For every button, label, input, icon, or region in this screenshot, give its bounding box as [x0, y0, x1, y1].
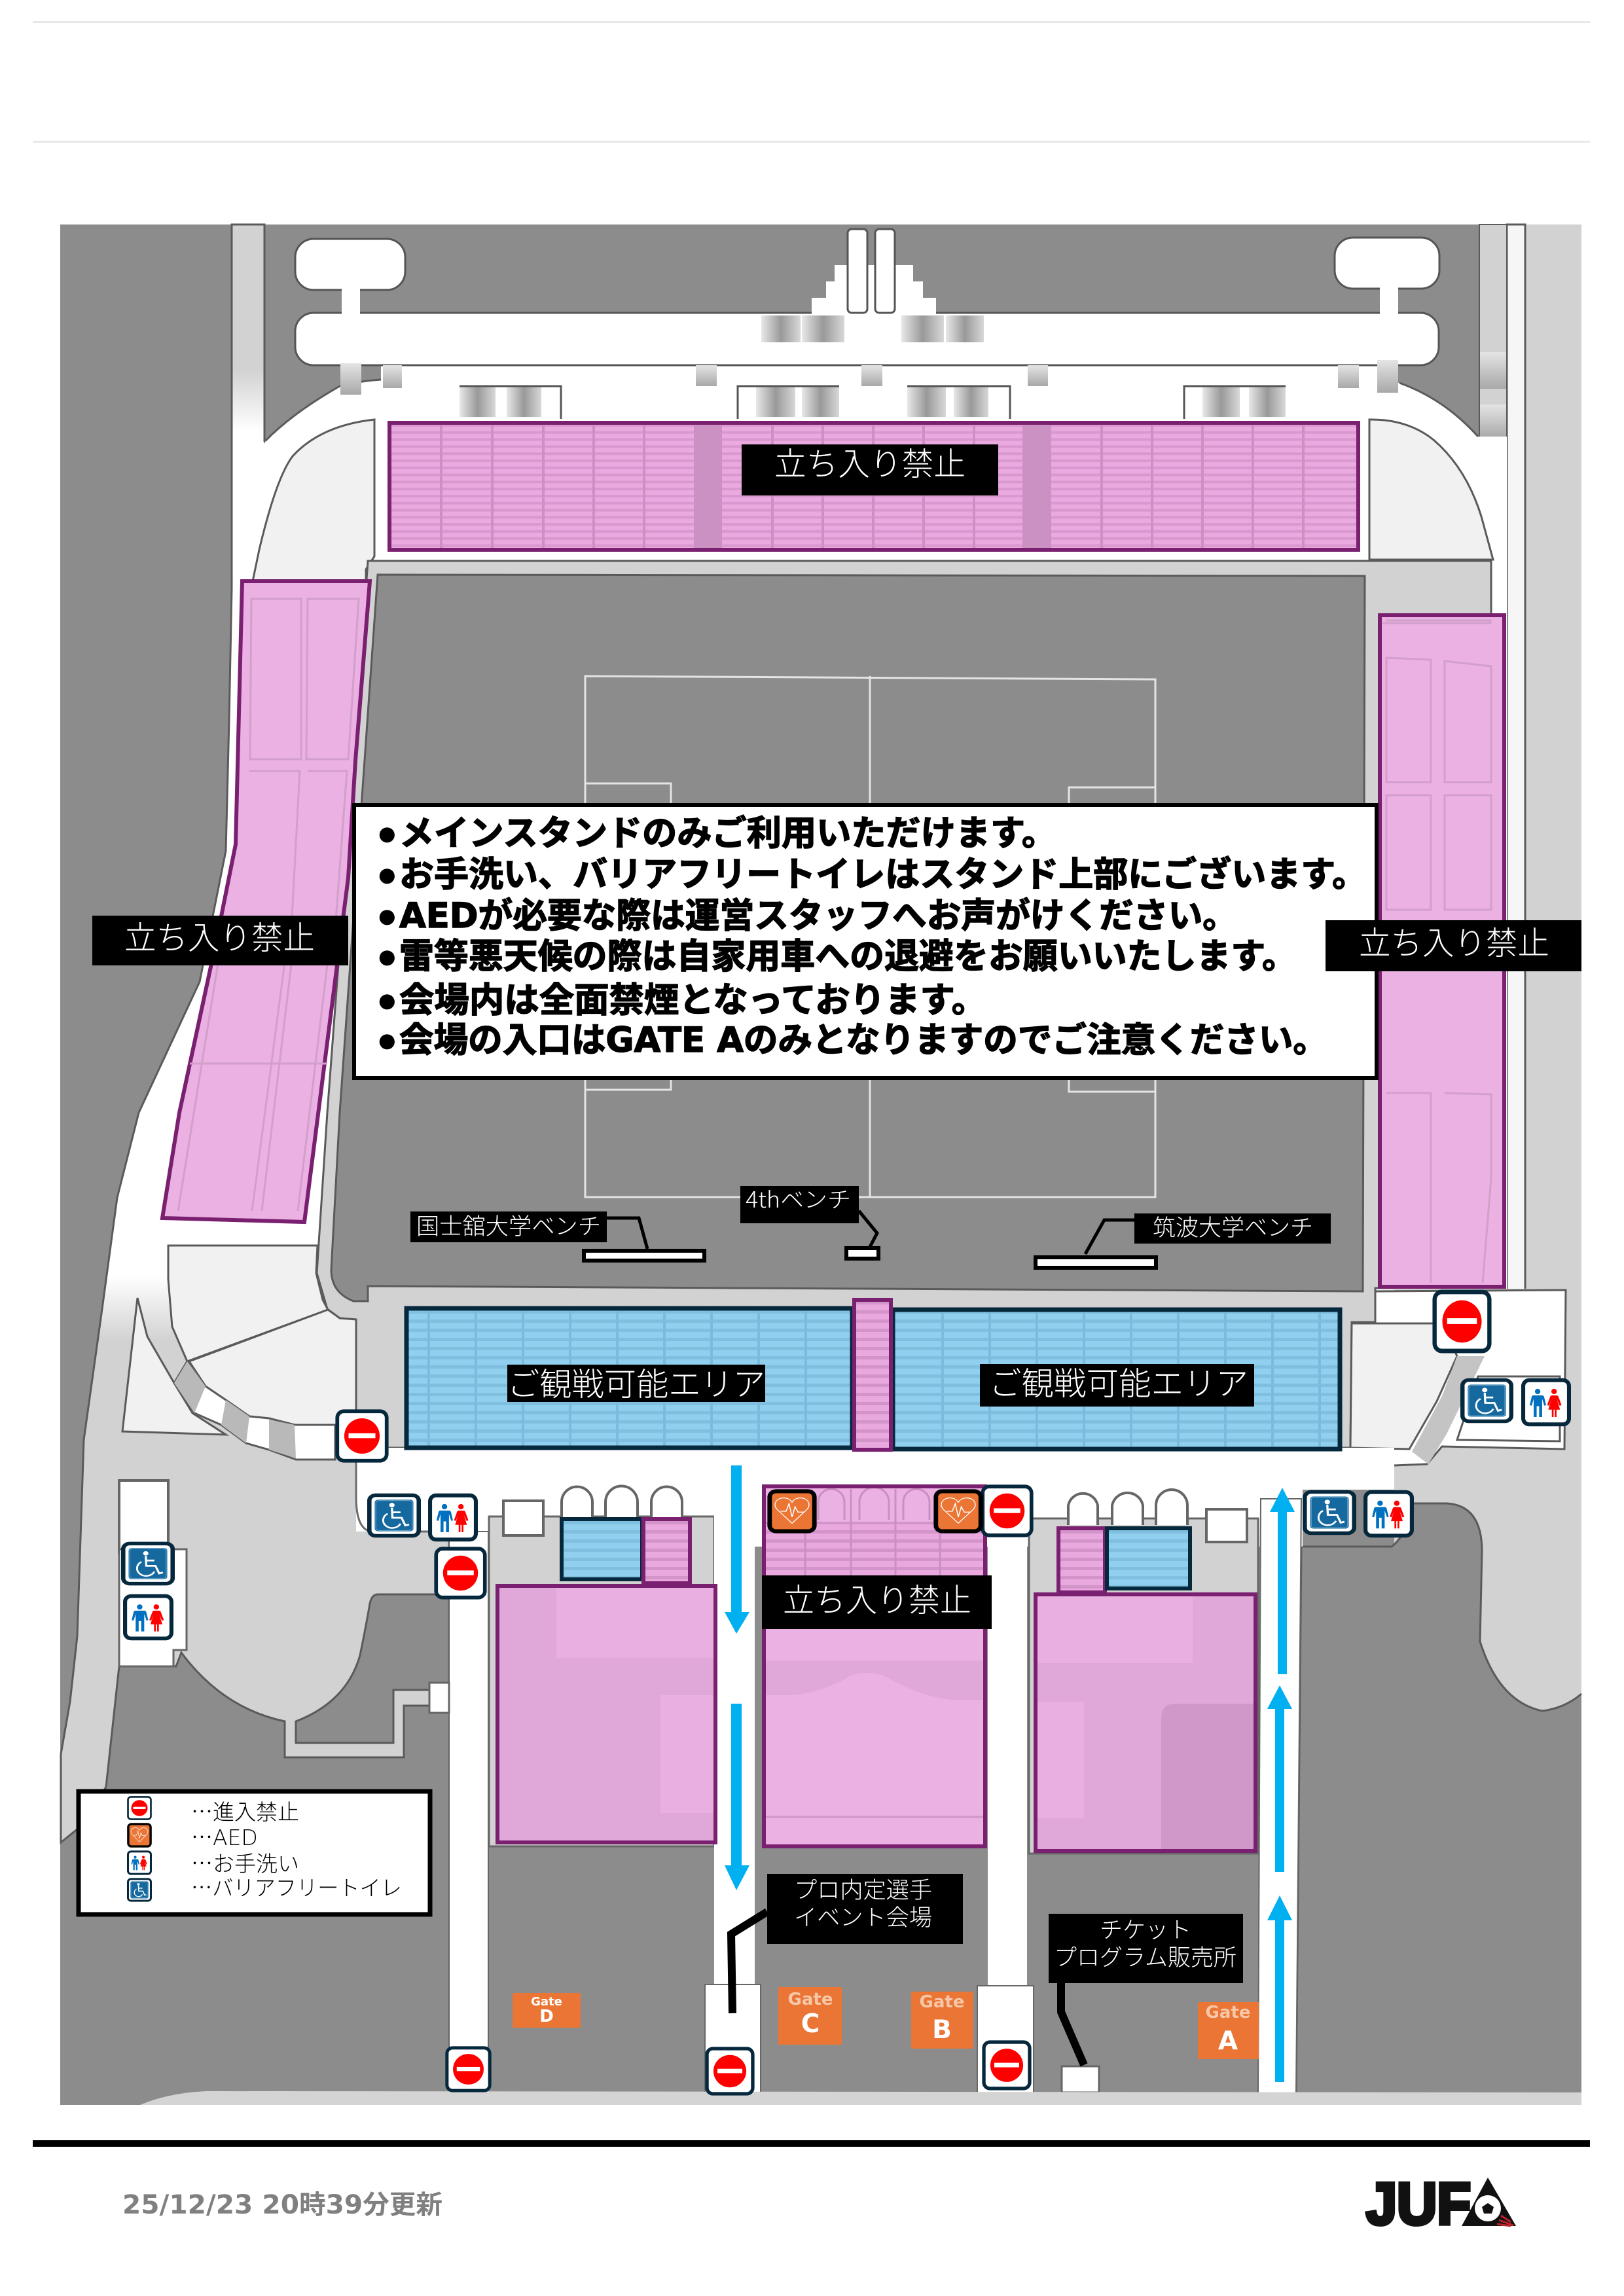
- legend text: …AED: [191, 1820, 258, 1852]
- label: pro event venue: プロ内定選手: [794, 1872, 932, 1905]
- label: no entry east: 立ち入り禁止: [1359, 918, 1549, 964]
- pale plaza west C: [122, 1298, 226, 1435]
- callout: notices: AEDが必要な際は運営スタッフへお声がけください。: [399, 896, 1237, 936]
- legend icon: AED: [128, 1824, 151, 1846]
- road 2: [714, 1473, 755, 1990]
- bench: 4th official: [740, 1182, 878, 1259]
- callout: notices: 雷等悪天候の際は自家用車への退避をお願いいたします。: [399, 937, 1297, 977]
- callout: notices: ●: [376, 855, 398, 894]
- legend text: …進入禁止: [191, 1795, 299, 1826]
- gate B: [911, 1992, 973, 2049]
- legend text: [191, 1795, 402, 1902]
- footer rule: [33, 2140, 1590, 2147]
- gate B walkway box: [977, 1986, 1034, 2093]
- label: no entry west: 立ち入り禁止: [124, 912, 315, 959]
- west wall line of plaza: [356, 1448, 449, 1532]
- road 4: [1258, 1499, 1301, 2093]
- gate A: [1198, 2002, 1259, 2059]
- legend text: …バリアフリートイレ: [191, 1871, 402, 1902]
- right side strips: [1479, 224, 1581, 1337]
- callout: notices: お手洗い、バリアフリートイレはスタンド上部にございます。: [399, 855, 1367, 895]
- legend icon: no entry: [128, 1797, 151, 1820]
- panel: east stand (no entry): [1380, 615, 1504, 1287]
- south plaza white: [356, 1448, 1394, 1547]
- panel: centre aisle (no entry): [854, 1300, 891, 1450]
- callout: notices: ●: [376, 937, 398, 976]
- panel: west small blue stand: [562, 1519, 642, 1579]
- east stairs: [1412, 1356, 1485, 1464]
- icon: toilet east upper: [1523, 1380, 1569, 1424]
- label: no entry north: [742, 439, 998, 495]
- bench: Tsukuba: 筑波大学ベンチ: [1153, 1210, 1313, 1243]
- light band around pitch: [317, 561, 1491, 1448]
- gate A: A: [1218, 2026, 1238, 2056]
- callout: notices: メインスタンドのみご利用いただけます。: [399, 814, 1056, 853]
- arrow: up 3: [1267, 1895, 1292, 2082]
- panel: west small pink stand: [643, 1519, 690, 1583]
- ticket booth box: [1062, 2066, 1099, 2092]
- label: ticket and programme sales: チケット: [1100, 1912, 1191, 1945]
- gate C walkway box: [705, 1984, 761, 2093]
- east small room: [1457, 1376, 1560, 1441]
- panel: spectator stand west (blue): [406, 1308, 852, 1448]
- gate D: D: [539, 2007, 554, 2026]
- stub stairs under north pill: [340, 360, 1398, 395]
- gate D: Gate: [531, 1995, 562, 2009]
- label: spectator area west: ご観戦可能エリア: [507, 1359, 765, 1405]
- icon: toilet west block: [125, 1596, 171, 1638]
- east pale room: [1350, 1323, 1457, 1449]
- legend: [79, 1791, 430, 1914]
- legend icon: accessible toilet: [128, 1879, 151, 1901]
- bench: Kokushikan: [410, 1208, 704, 1261]
- pitch surface: [331, 575, 1365, 1301]
- icon: toilet plaza east: [1365, 1492, 1412, 1535]
- icon: accessible toilet east upper: [1462, 1380, 1511, 1422]
- callout: notices: ●: [376, 814, 398, 853]
- gate C: [778, 1987, 842, 2045]
- stand entrances: [460, 386, 1286, 422]
- east white block: [1375, 1290, 1566, 1465]
- dark pocket in west plaza: [296, 1594, 449, 1743]
- panel: west stand (no entry): [162, 581, 370, 1222]
- central stepped platform: [812, 229, 936, 342]
- gate C: Gate: [788, 1990, 833, 2009]
- east dark lot edge: [1296, 1503, 1581, 2093]
- icon: no entry road 1: [436, 1549, 485, 1598]
- arrow: down 1: [725, 1465, 749, 1634]
- label: pro event venue: イベント会場: [794, 1899, 932, 1933]
- label: no entry west: [92, 912, 348, 965]
- icon: no entry north east: [1435, 1292, 1489, 1351]
- arches west: [562, 1486, 682, 1518]
- north concourse white area: [264, 365, 1507, 1293]
- icon: no entry south road 1: [447, 2048, 490, 2090]
- bench: Tsukuba: [1036, 1210, 1331, 1268]
- panel: centre building (no entry): [764, 1486, 985, 1848]
- left road and west plaza: [61, 224, 449, 1842]
- header rule bottom: [33, 141, 1590, 143]
- icon: accessible toilet plaza east: [1305, 1492, 1354, 1533]
- bench: 4th official: 4thベンチ: [746, 1182, 851, 1214]
- label: no entry east: [1326, 918, 1581, 971]
- callout: notices: ●: [376, 1020, 398, 1060]
- icon: no entry centre: [983, 1486, 1032, 1535]
- icon: no entry west: [337, 1411, 387, 1461]
- icon: accessible toilet west block: [123, 1543, 173, 1584]
- label: no entry north: 立ち入り禁止: [774, 439, 965, 485]
- callout: notices: [354, 805, 1377, 1078]
- road 1: [449, 1532, 488, 2055]
- label: ticket and programme sales: プログラム販売所: [1054, 1939, 1236, 1973]
- icon: toilet plaza west: [430, 1496, 476, 1539]
- label: no entry centre: 立ち入り禁止: [783, 1575, 971, 1621]
- icon: accessible toilet plaza west: [369, 1495, 419, 1536]
- icon: AED east: [936, 1491, 981, 1532]
- legend text: …お手洗い: [191, 1846, 299, 1878]
- stairs on west walkway: [174, 1361, 296, 1458]
- stadium map: [60, 224, 1581, 2105]
- arches east: [1068, 1490, 1187, 1525]
- icon: no entry gate B: [984, 2042, 1030, 2089]
- callout: notices: 会場の入口はGATE Aのみとなりますのでご注意ください。: [399, 1020, 1327, 1060]
- gate A: Gate: [1206, 2003, 1250, 2022]
- label: pro event venue: [731, 1872, 963, 2013]
- central stairs: [761, 315, 984, 342]
- ground west building: [489, 1516, 714, 1846]
- header rule top: [33, 21, 1590, 23]
- east dark lot: [1296, 1503, 1581, 2105]
- panel: spectator stand east (blue): [893, 1310, 1340, 1449]
- update timestamp: 25/12/23 20時39分更新: [122, 2190, 442, 2220]
- arrow: down 2: [725, 1704, 749, 1890]
- legend icon: toilet: [128, 1852, 151, 1874]
- label: spectator area east: ご観戦可能エリア: [989, 1358, 1248, 1405]
- pill connectors: [342, 287, 1398, 315]
- ground east building: [1029, 1518, 1258, 1854]
- gate B: Gate: [920, 1992, 964, 2012]
- map dark ground: [60, 224, 1581, 2105]
- arrow: up 2: [1267, 1685, 1292, 1872]
- label: ticket and programme sales: [1049, 1912, 1243, 2065]
- panel: east small blue stand: [1107, 1528, 1190, 1588]
- callout: notices: ●: [376, 896, 398, 935]
- gate D: [513, 1993, 581, 2028]
- west toilet block: [119, 1549, 187, 1666]
- pale corner north west: [253, 420, 374, 581]
- panel: north stand (no entry): [389, 423, 1358, 550]
- panel: east small pink stand: [1058, 1528, 1105, 1592]
- white kiosks: [119, 1480, 1247, 1713]
- pitch lines: [585, 676, 1155, 1197]
- east plaza ground: [1394, 1289, 1581, 1741]
- arrow: up 1: [1270, 1488, 1295, 1674]
- pale corner north east: [1369, 420, 1493, 560]
- west curved walkway: [174, 1361, 335, 1460]
- icon: AED west: [770, 1491, 814, 1532]
- north pedestrian pills: [295, 238, 1439, 365]
- gate B: B: [932, 2015, 952, 2045]
- road 3: [988, 1473, 1027, 1990]
- gate C: C: [801, 2009, 820, 2039]
- pale plaza west B: [189, 1310, 356, 1425]
- panel: west building (no entry): [497, 1586, 715, 1842]
- panel: east building (no entry): [1036, 1594, 1255, 1851]
- north concourse corner edges: [265, 380, 1478, 441]
- callout: notices: 会場内は全面禁煙となっております。: [399, 980, 986, 1020]
- icon: no entry gate C: [707, 2049, 753, 2094]
- logo: JUFA: JUF: [1366, 2172, 1471, 2237]
- bench: Kokushikan: 国士舘大学ベンチ: [416, 1208, 601, 1242]
- pale plaza west A: [168, 1246, 328, 1361]
- callout: notices: ●: [376, 980, 398, 1020]
- south light verge: [140, 2091, 1581, 2105]
